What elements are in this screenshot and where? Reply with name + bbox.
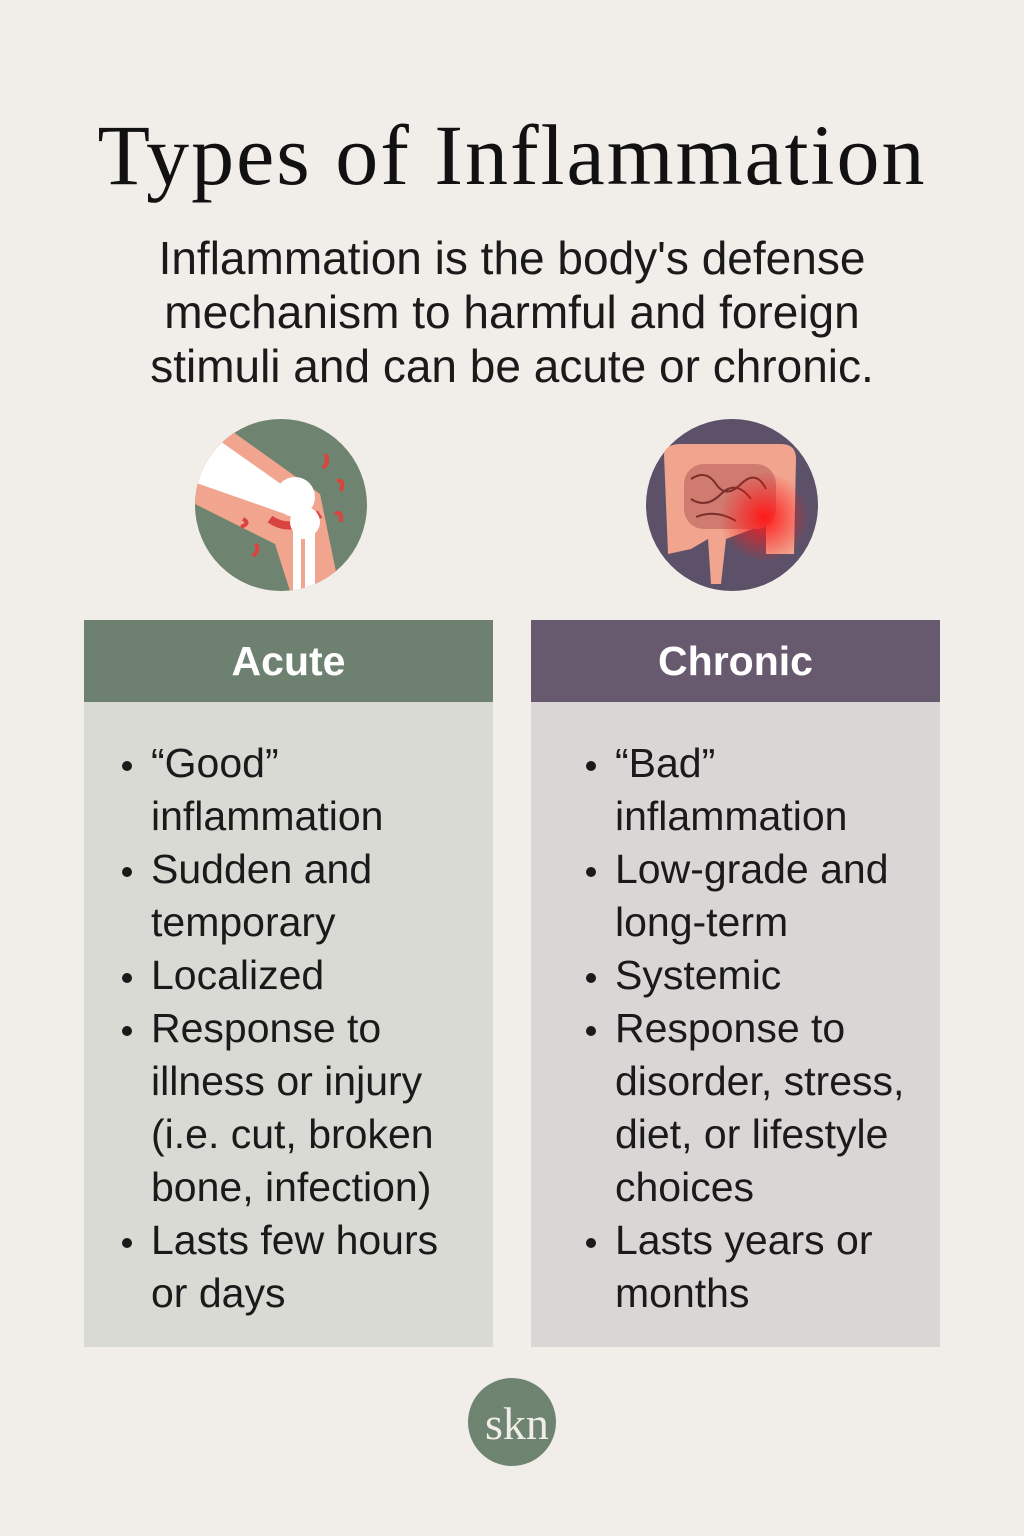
acute list: Localized bbox=[151, 952, 324, 998]
chronic list: choices bbox=[615, 1164, 754, 1210]
subtitle: mechanism to harmful and foreign bbox=[164, 286, 860, 338]
acute list: (i.e. cut, broken bbox=[151, 1111, 434, 1157]
subtitle: stimuli and can be acute or chronic. bbox=[150, 340, 874, 392]
panel: acute bbox=[84, 620, 493, 1347]
icon: knee bbox=[195, 419, 367, 591]
chronic list: disorder, stress, bbox=[615, 1058, 904, 1104]
acute list: Lasts few hours bbox=[151, 1217, 438, 1263]
acute list: Response to bbox=[151, 1005, 381, 1051]
panel: chronic bbox=[531, 620, 940, 1347]
acute list bbox=[84, 702, 493, 1347]
acute list: or days bbox=[151, 1270, 285, 1316]
acute header: Acute bbox=[232, 638, 345, 684]
chronic list: Lasts years or bbox=[615, 1217, 872, 1263]
acute list: bone, infection) bbox=[151, 1164, 431, 1210]
chronic list: Systemic bbox=[615, 952, 781, 998]
icon: intestines bbox=[646, 419, 818, 591]
chronic list: inflammation bbox=[615, 793, 847, 839]
chronic list bbox=[531, 702, 940, 1347]
chronic header bbox=[531, 620, 940, 702]
logo: skn bbox=[485, 1398, 549, 1449]
title: Types of Inflammation bbox=[98, 107, 926, 203]
chronic list: long-term bbox=[615, 899, 788, 945]
acute list: inflammation bbox=[151, 793, 383, 839]
logo bbox=[468, 1378, 556, 1466]
acute list: Sudden and bbox=[151, 846, 372, 892]
chronic list: Low-grade and bbox=[615, 846, 889, 892]
subtitle bbox=[150, 232, 874, 392]
chronic list: Response to bbox=[615, 1005, 845, 1051]
chronic list: diet, or lifestyle bbox=[615, 1111, 888, 1157]
chronic list: months bbox=[615, 1270, 749, 1316]
acute list: illness or injury bbox=[151, 1058, 422, 1104]
chronic header: Chronic bbox=[658, 638, 813, 684]
acute list: temporary bbox=[151, 899, 336, 945]
acute header bbox=[84, 620, 493, 702]
chronic list: “Bad” bbox=[615, 740, 715, 786]
subtitle: Inflammation is the body's defense bbox=[159, 232, 865, 284]
acute list: “Good” bbox=[151, 740, 279, 786]
